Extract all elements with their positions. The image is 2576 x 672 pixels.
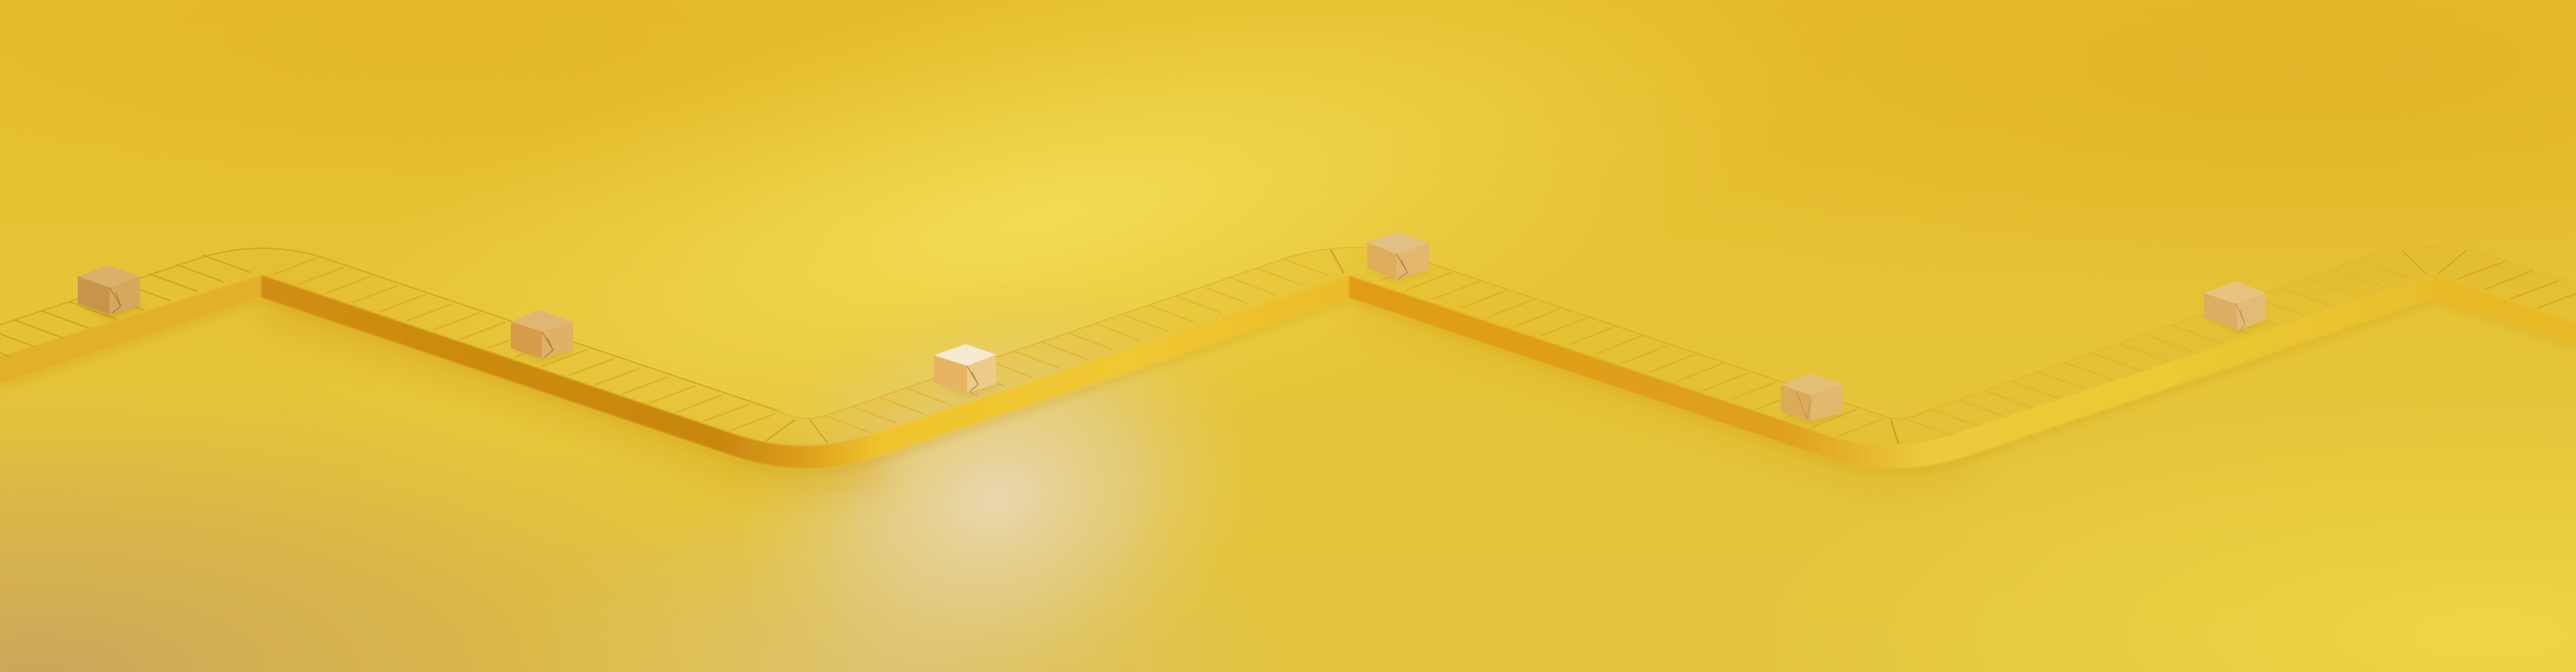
parcel 5 top face: [1781, 373, 1842, 395]
parcel 5: [1781, 373, 1846, 424]
belt back edge line: [0, 247, 2576, 419]
slats: first valley radial: [767, 420, 828, 443]
parcel 1 top face: [78, 266, 140, 287]
slats: second peak radial: [1331, 250, 1343, 273]
slats: left segment: [0, 255, 250, 357]
slats: first descent: [272, 258, 775, 431]
conveyor belt top surface: [0, 247, 2576, 446]
wall: right descending segment: [2433, 275, 2576, 344]
wall: first valley: [261, 275, 1349, 468]
wall: left rising segment: [0, 275, 261, 384]
slats: second ascent: [1905, 261, 2410, 436]
slats: right peak and descent: [2402, 251, 2576, 308]
slats: second valley radial: [1891, 420, 1898, 444]
parcel 6 top face: [2204, 281, 2266, 304]
wall shadows on the floor: [0, 300, 2576, 478]
parcel 6: [2204, 281, 2270, 334]
parcel 2 top face: [511, 310, 573, 332]
wall: second valley: [1349, 275, 2433, 468]
parcel 1: [78, 266, 144, 319]
parcel 2: [511, 310, 576, 362]
parcel 4 top face: [1367, 231, 1429, 254]
parcel 4: [1367, 231, 1432, 282]
conveyor front walls: [0, 275, 2576, 468]
slats: second descent: [1380, 263, 1883, 436]
parcel 3: brightly lit: [934, 344, 999, 397]
slats: first ascent: [825, 259, 1329, 432]
belt slats: [0, 250, 2576, 444]
parcel 3 top face: [934, 344, 996, 366]
